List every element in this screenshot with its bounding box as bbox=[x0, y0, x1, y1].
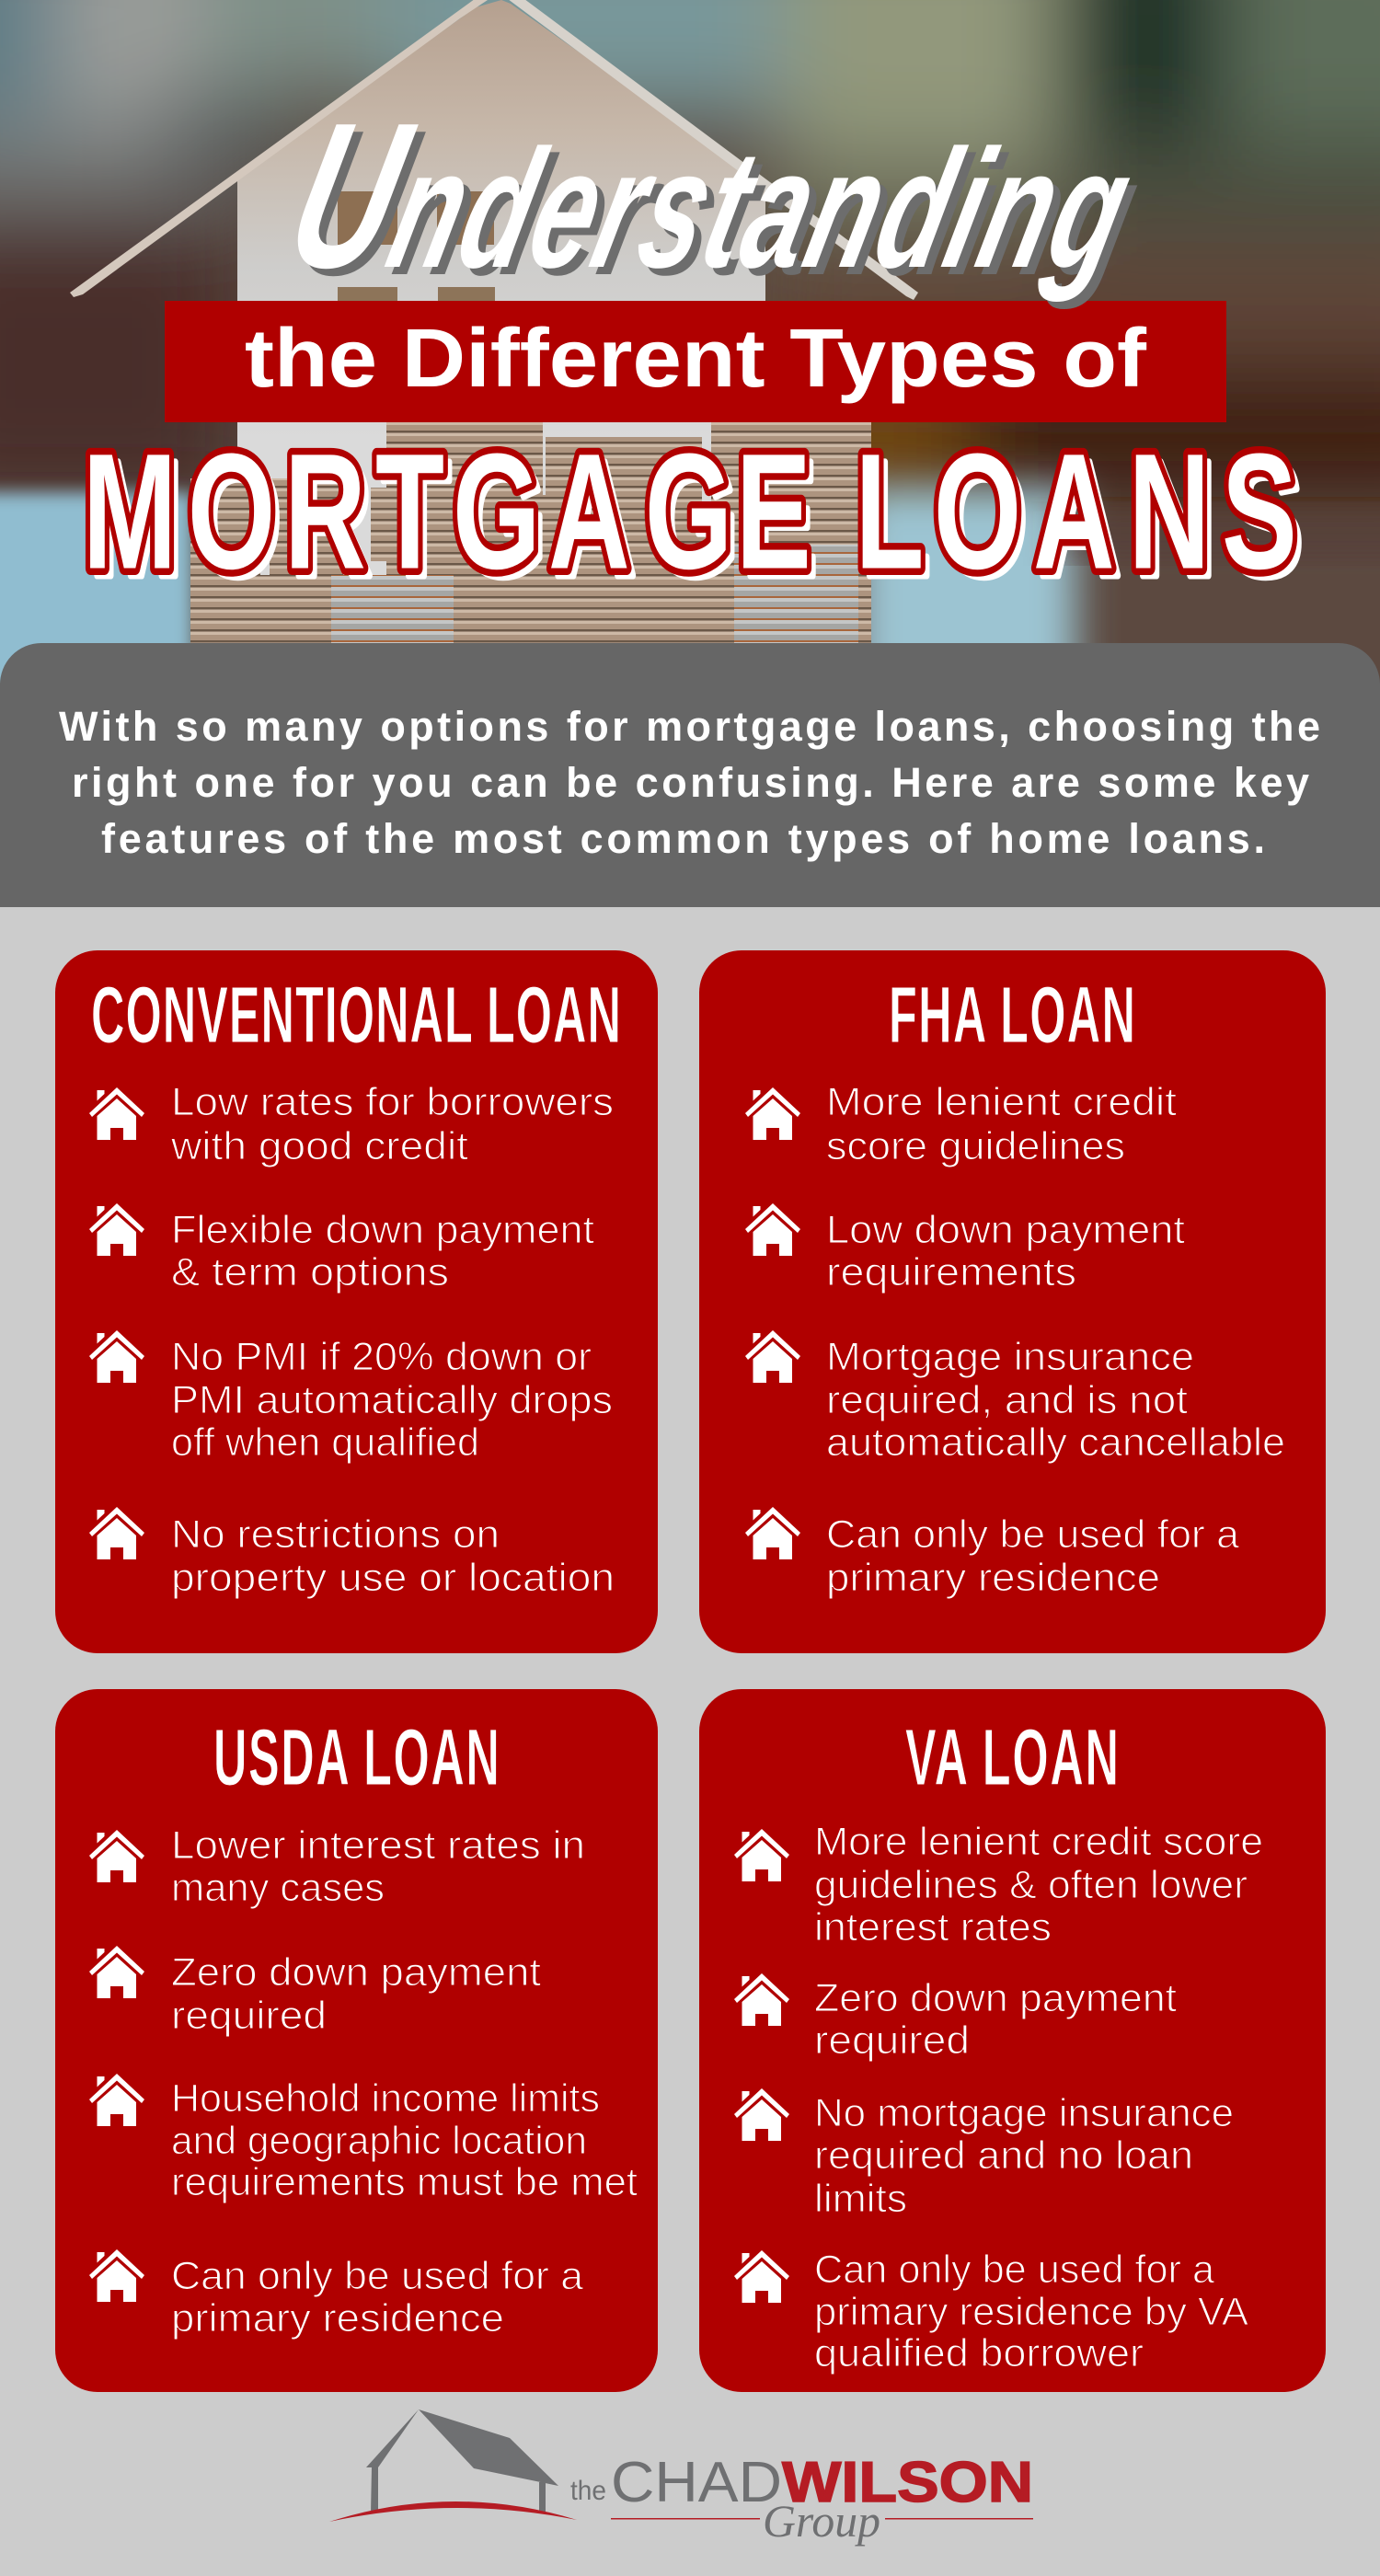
title script: Understanding: Understanding bbox=[278, 88, 1164, 319]
panel: FHA Loan bbox=[699, 950, 1326, 1653]
icon: house bbox=[734, 1973, 789, 2026]
title script: Understanding: Understanding bbox=[270, 81, 1156, 312]
bullet text: Zero down payment bbox=[814, 1976, 1177, 2020]
house windows bbox=[338, 191, 397, 245]
intro panel bbox=[0, 643, 1380, 907]
bullet text: No PMI if 20% down or bbox=[171, 1335, 592, 1379]
bullet text: required and no loan bbox=[814, 2133, 1193, 2178]
bullet text: required, and is not bbox=[826, 1378, 1188, 1422]
panel: VA Loan bbox=[699, 1689, 1326, 2392]
bullet text: More lenient credit score bbox=[814, 1820, 1263, 1864]
bullet text: More lenient credit bbox=[826, 1080, 1177, 1124]
bullet text: score guidelines bbox=[826, 1124, 1125, 1168]
bullet text: with good credit bbox=[170, 1124, 468, 1168]
bullet text bbox=[826, 1080, 1177, 1168]
bullet text: property use or location bbox=[171, 1556, 615, 1600]
bullet text: PMI automatically drops bbox=[171, 1378, 613, 1422]
title: MORTGAGE LOANS: MORTGAGE LOANS bbox=[83, 419, 1297, 604]
red banner with subtitle bbox=[165, 301, 1226, 422]
heading: Conventional Loan: CONVENTIONAL LOAN bbox=[91, 972, 621, 1061]
icon: house bbox=[745, 1507, 800, 1559]
bullet text: Flexible down payment bbox=[171, 1208, 594, 1252]
bullet text: & term options bbox=[171, 1250, 449, 1294]
bullet text: limits bbox=[814, 2177, 907, 2221]
panel: USDA Loan bbox=[55, 1689, 658, 2392]
bullet text bbox=[814, 1976, 1177, 2063]
bullet text: Can only be used for a bbox=[171, 2254, 583, 2298]
bullet text: No mortgage insurance bbox=[814, 2091, 1234, 2135]
logo house mark bbox=[329, 2409, 577, 2522]
bullet text: required bbox=[814, 2018, 970, 2063]
bullet text bbox=[826, 1208, 1185, 1294]
bullet text: requirements bbox=[826, 1250, 1076, 1294]
bullet text bbox=[826, 1335, 1285, 1465]
bullet text bbox=[814, 2248, 1248, 2375]
title: MORTGAGE LOANS: MORTGAGE LOANS bbox=[89, 426, 1304, 611]
bullet text: many cases bbox=[171, 1866, 385, 1910]
icon: house bbox=[89, 1087, 144, 1140]
heading: VA Loan: VA LOAN bbox=[905, 1714, 1119, 1803]
icon: house bbox=[745, 1203, 800, 1256]
heading: USDA Loan: USDA LOAN bbox=[213, 1714, 500, 1803]
icon: house bbox=[89, 1830, 144, 1882]
red banner with subtitle: the Different Types of bbox=[245, 313, 1147, 405]
icon: house bbox=[745, 1087, 800, 1140]
icon: house bbox=[89, 1203, 144, 1256]
bullet text bbox=[171, 1823, 585, 1910]
bullet text: Mortgage insurance bbox=[826, 1335, 1194, 1379]
logo wordmark: the bbox=[570, 2476, 606, 2506]
logo: The Chad Wilson Group bbox=[329, 2409, 1033, 2547]
bullet text: Zero down payment bbox=[171, 1950, 541, 1995]
bullet text bbox=[814, 1820, 1263, 1949]
icon: house bbox=[89, 1507, 144, 1559]
bullet text: requirements must be met bbox=[171, 2160, 638, 2204]
blurred table surface bbox=[1076, 534, 1380, 718]
title: MORTGAGE LOANS: MORTGAGE LOANS bbox=[83, 419, 1297, 604]
panel: Conventional Loan bbox=[55, 950, 658, 1653]
bullet text: automatically cancellable bbox=[826, 1420, 1285, 1465]
hero photo: paper house and coin stacks bbox=[0, 0, 1380, 718]
icon: house bbox=[89, 1946, 144, 1998]
icon: house bbox=[734, 1829, 789, 1881]
bullet text: required bbox=[171, 1994, 327, 2038]
bullet text bbox=[170, 1080, 614, 1168]
logo wordmark: WILSON bbox=[782, 2451, 1033, 2514]
bullet text: primary residence bbox=[826, 1556, 1160, 1600]
bullet text: Low rates for borrowers bbox=[171, 1080, 614, 1124]
bullet text: primary residence bbox=[171, 2296, 504, 2340]
bullet text: interest rates bbox=[814, 1905, 1052, 1949]
logo wordmark: CHAD bbox=[611, 2451, 782, 2514]
icon: house bbox=[89, 1330, 144, 1383]
bullet text bbox=[171, 1512, 615, 1600]
bullet text bbox=[171, 1208, 594, 1294]
icon: house bbox=[89, 2249, 144, 2302]
bullet text: Lower interest rates in bbox=[171, 1823, 585, 1868]
bullet text: Can only be used for a bbox=[814, 2248, 1214, 2292]
house wall bbox=[237, 0, 765, 589]
bullet text: No restrictions on bbox=[171, 1512, 500, 1557]
bullet text: primary residence by VA bbox=[814, 2290, 1248, 2334]
bullet text bbox=[171, 2254, 583, 2340]
bullet text: guidelines & often lower bbox=[814, 1863, 1248, 1907]
logo wordmark: Group bbox=[763, 2495, 880, 2547]
roof strips bbox=[70, 0, 493, 297]
coin stacks bbox=[711, 422, 871, 644]
logo wordmark bbox=[570, 2451, 1033, 2547]
bullet text: and geographic location bbox=[171, 2119, 587, 2163]
icon: house bbox=[734, 2250, 789, 2303]
intro panel: With so many options for mortgage loans, choosing the bbox=[59, 703, 1320, 750]
icon: house bbox=[745, 1330, 800, 1383]
bullet text: Can only be used for a bbox=[826, 1512, 1239, 1557]
heading: FHA Loan: FHA LOAN bbox=[889, 972, 1135, 1061]
icon: house bbox=[734, 2088, 789, 2141]
icon: house bbox=[89, 2074, 144, 2126]
bullet text bbox=[826, 1512, 1239, 1600]
bullet text: Household income limits bbox=[171, 2076, 600, 2121]
bullet text: qualified borrower bbox=[814, 2331, 1144, 2375]
intro panel: features of the most common types of home loans. bbox=[101, 815, 1265, 862]
bullet text: Low down payment bbox=[826, 1208, 1185, 1252]
bullet text bbox=[171, 2076, 638, 2204]
intro panel: right one for you can be confusing. Here are some key bbox=[72, 759, 1309, 806]
bullet text bbox=[171, 1950, 541, 2038]
bullet text: off when qualified bbox=[171, 1420, 479, 1465]
bullet text bbox=[171, 1335, 613, 1465]
bullet text bbox=[814, 2091, 1234, 2221]
